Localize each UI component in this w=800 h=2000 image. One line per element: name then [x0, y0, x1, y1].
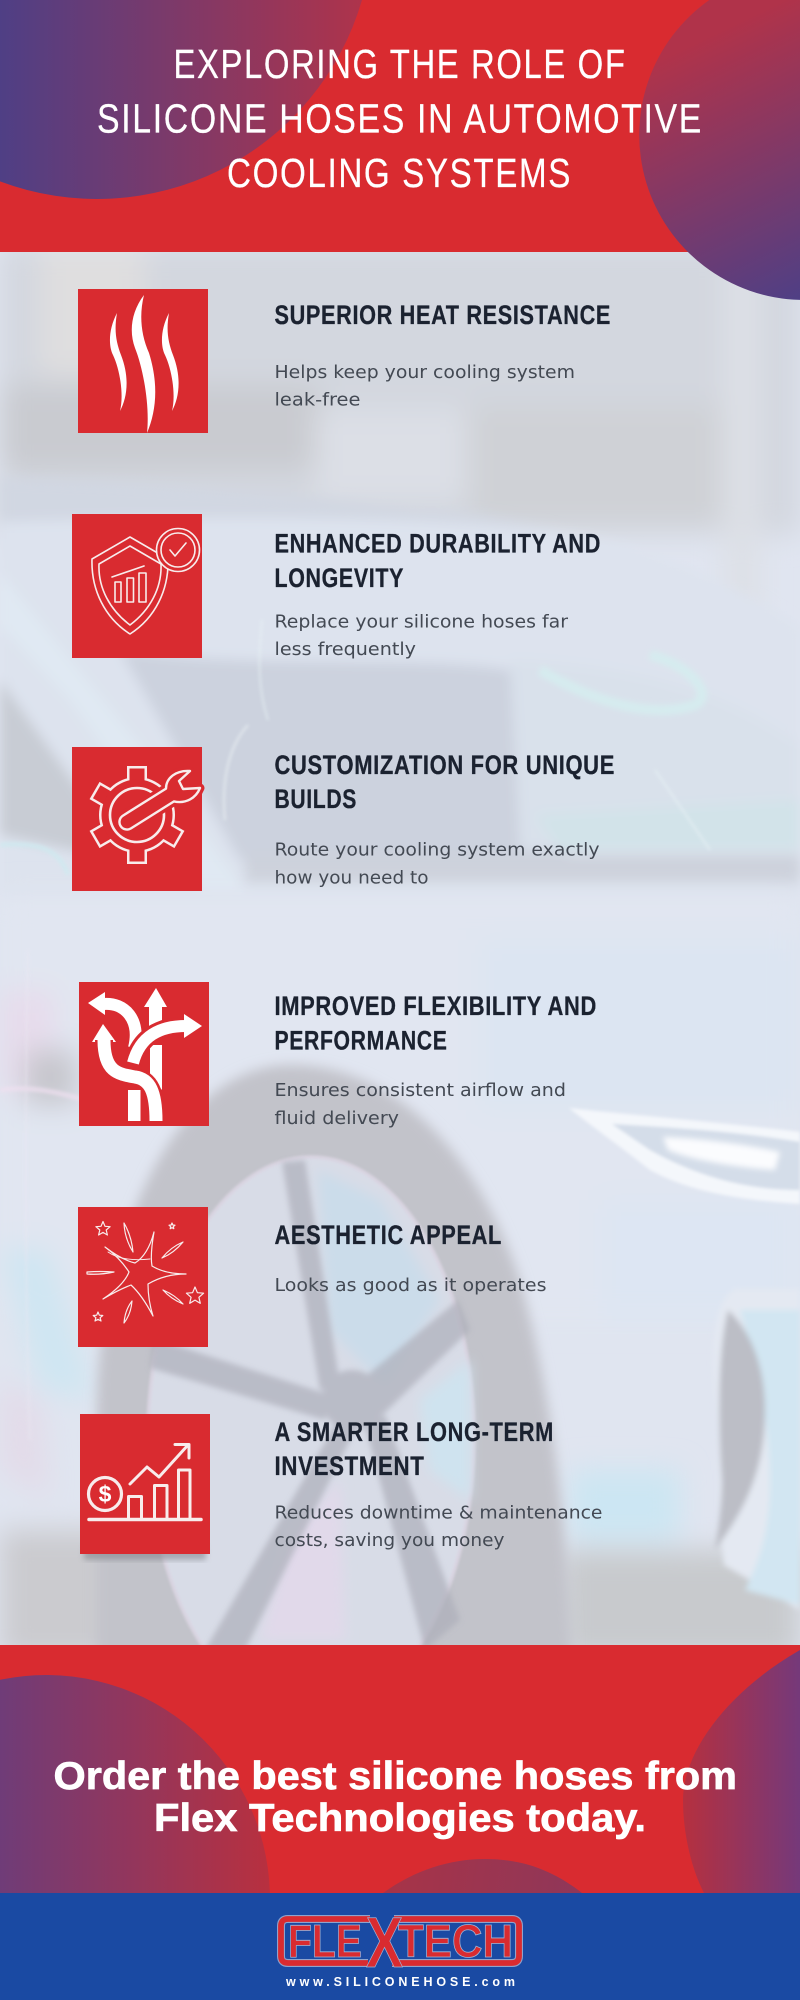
- item 3: customization for unique builds: [72, 747, 615, 891]
- body text: Ensures consistent airflow and: [274, 1081, 566, 1101]
- lower grille: [714, 1289, 800, 1610]
- body text: Looks as good as it operates: [274, 1276, 546, 1296]
- logo: Flextech: FLE: [288, 1915, 362, 1967]
- body text: fluid delivery: [274, 1109, 399, 1129]
- heading: [274, 750, 615, 814]
- footer band: [0, 1893, 800, 2000]
- heading: AESTHETIC APPEAL: [274, 1220, 502, 1250]
- heading: A SMARTER LONG-TERM: [274, 1417, 554, 1447]
- body text: [274, 612, 569, 660]
- body text: Replace your silicone hoses far: [274, 612, 569, 632]
- title: COOLING SYSTEMS: [227, 150, 572, 196]
- item 6: a smarter long-term investment: [80, 1414, 602, 1560]
- body text: costs, saving you money: [274, 1531, 504, 1551]
- heading: [274, 528, 601, 593]
- heading: [274, 1417, 554, 1481]
- icon: money and growth chart: [80, 1414, 210, 1560]
- decorative bump: bottom centre: [383, 1859, 582, 1893]
- body text: leak-free: [274, 390, 360, 410]
- heading: [274, 991, 597, 1056]
- logo: Flextech: [281, 1904, 519, 1989]
- decorative circle: bottom left: [0, 1675, 270, 1893]
- body text: [274, 840, 600, 888]
- background photo: blurred car: [0, 245, 800, 1717]
- decorative shape: bottom right: [683, 1650, 800, 1893]
- heading: PERFORMANCE: [274, 1026, 448, 1056]
- call to action text: Flex Technologies today.: [154, 1797, 646, 1840]
- item 1: superior heat resistance: [78, 289, 611, 433]
- icon: shield with chart and check: [72, 514, 202, 658]
- body text: less frequently: [274, 640, 416, 660]
- body text: Helps keep your cooling system: [274, 363, 575, 383]
- body text: [274, 363, 575, 410]
- headlight: [569, 1108, 800, 1204]
- hood and door: [0, 1009, 800, 1645]
- decorative circle: top left: [0, 0, 362, 199]
- body text: Reduces downtime & maintenance: [274, 1504, 602, 1524]
- building backdrop: [0, 252, 800, 584]
- item 4: improved flexibility and performance: [79, 982, 597, 1129]
- car roof and windscreen: [0, 519, 800, 884]
- call to action text: Order the best silicone hoses from: [54, 1755, 737, 1798]
- title: [97, 41, 703, 196]
- body text: [274, 1504, 602, 1551]
- icon: branching arrows: [79, 982, 209, 1126]
- item 5: aesthetic appeal: [78, 1207, 546, 1347]
- heading: LONGEVITY: [274, 563, 404, 593]
- body text: how you need to: [274, 868, 428, 888]
- heading: ENHANCED DURABILITY AND: [274, 528, 601, 558]
- heading: INVESTMENT: [274, 1451, 424, 1481]
- icon: heat waves: [78, 289, 208, 433]
- body text: Route your cooling system exactly: [274, 840, 600, 860]
- item 2: enhanced durability and longevity: [72, 514, 601, 660]
- logo: Flextech: www.SILICONEHOSE.com: [285, 1975, 515, 1989]
- heading: SUPERIOR HEAT RESISTANCE: [274, 300, 611, 330]
- wheel arch and tyre: [97, 1065, 572, 1717]
- windscreen reflections: [540, 655, 702, 710]
- header band: [0, 0, 800, 252]
- logo: Flextech: X: [366, 1904, 403, 1983]
- heading: IMPROVED FLEXIBILITY AND: [274, 991, 597, 1021]
- logo: Flextech: TECH: [398, 1915, 513, 1967]
- icon: sparkle burst: [78, 1207, 208, 1347]
- heading: CUSTOMIZATION FOR UNIQUE: [274, 750, 615, 780]
- call to action band: [0, 1645, 800, 1893]
- title: EXPLORING THE ROLE OF: [174, 41, 626, 87]
- decorative circle: top right: [639, 0, 800, 300]
- call to action text: [54, 1755, 737, 1840]
- icon: money and growth chart: $: [99, 1481, 112, 1507]
- body text: [274, 1081, 566, 1129]
- icon: gear and wrench: [72, 747, 202, 891]
- heading: BUILDS: [274, 784, 357, 814]
